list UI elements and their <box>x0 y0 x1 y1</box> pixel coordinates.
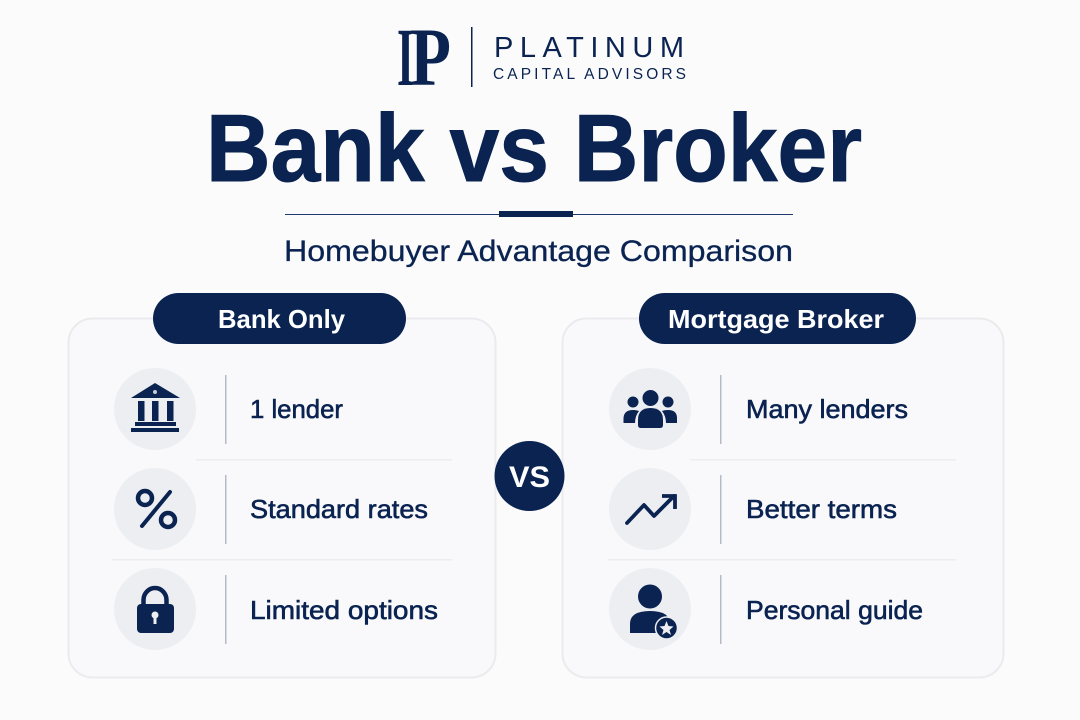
label: Better terms <box>746 494 897 524</box>
row: Personal guide <box>609 568 923 650</box>
label: 1 lender <box>250 394 343 424</box>
label: Personal guide <box>746 595 923 625</box>
row: Limited options <box>114 568 438 650</box>
label: Limited options <box>250 595 438 625</box>
icon: bank <box>114 368 196 450</box>
row: 1 lender <box>114 368 343 450</box>
icon: people <box>609 368 691 450</box>
title divider <box>285 211 793 217</box>
logo monogram IP <box>397 11 451 103</box>
panel: Mortgage Broker <box>562 293 1004 678</box>
logo monogram IP: P <box>410 11 451 103</box>
label: Many lenders <box>746 394 908 424</box>
row: Better terms <box>609 468 897 550</box>
heading pill: Mortgage Broker: Mortgage Broker <box>668 304 884 334</box>
VS badge <box>494 441 564 511</box>
logo tagline: CAPITAL ADVISORS <box>493 66 686 83</box>
icon: percent <box>114 468 196 550</box>
subtitle: Homebuyer Advantage Comparison <box>284 235 793 268</box>
icon: trending arrow <box>609 468 691 550</box>
icon: person with star <box>609 568 691 650</box>
title: Bank vs Broker <box>206 95 862 202</box>
row: Standard rates <box>114 468 428 550</box>
logo: Platinum Capital Advisors <box>397 11 686 103</box>
VS badge: VS <box>509 461 550 494</box>
heading pill: Mortgage Broker <box>639 293 916 344</box>
label: Standard rates <box>250 494 428 524</box>
row dividers <box>112 459 452 560</box>
heading pill: Bank Only: Bank Only <box>218 304 346 334</box>
panel: Bank Only <box>68 293 496 678</box>
row dividers <box>608 459 956 560</box>
logo monogram IP: I <box>397 11 414 103</box>
heading pill: Bank Only <box>153 293 406 344</box>
icon: padlock <box>114 568 196 650</box>
logo wordmark: PLATINUM <box>494 32 684 64</box>
row: Many lenders <box>609 368 908 450</box>
